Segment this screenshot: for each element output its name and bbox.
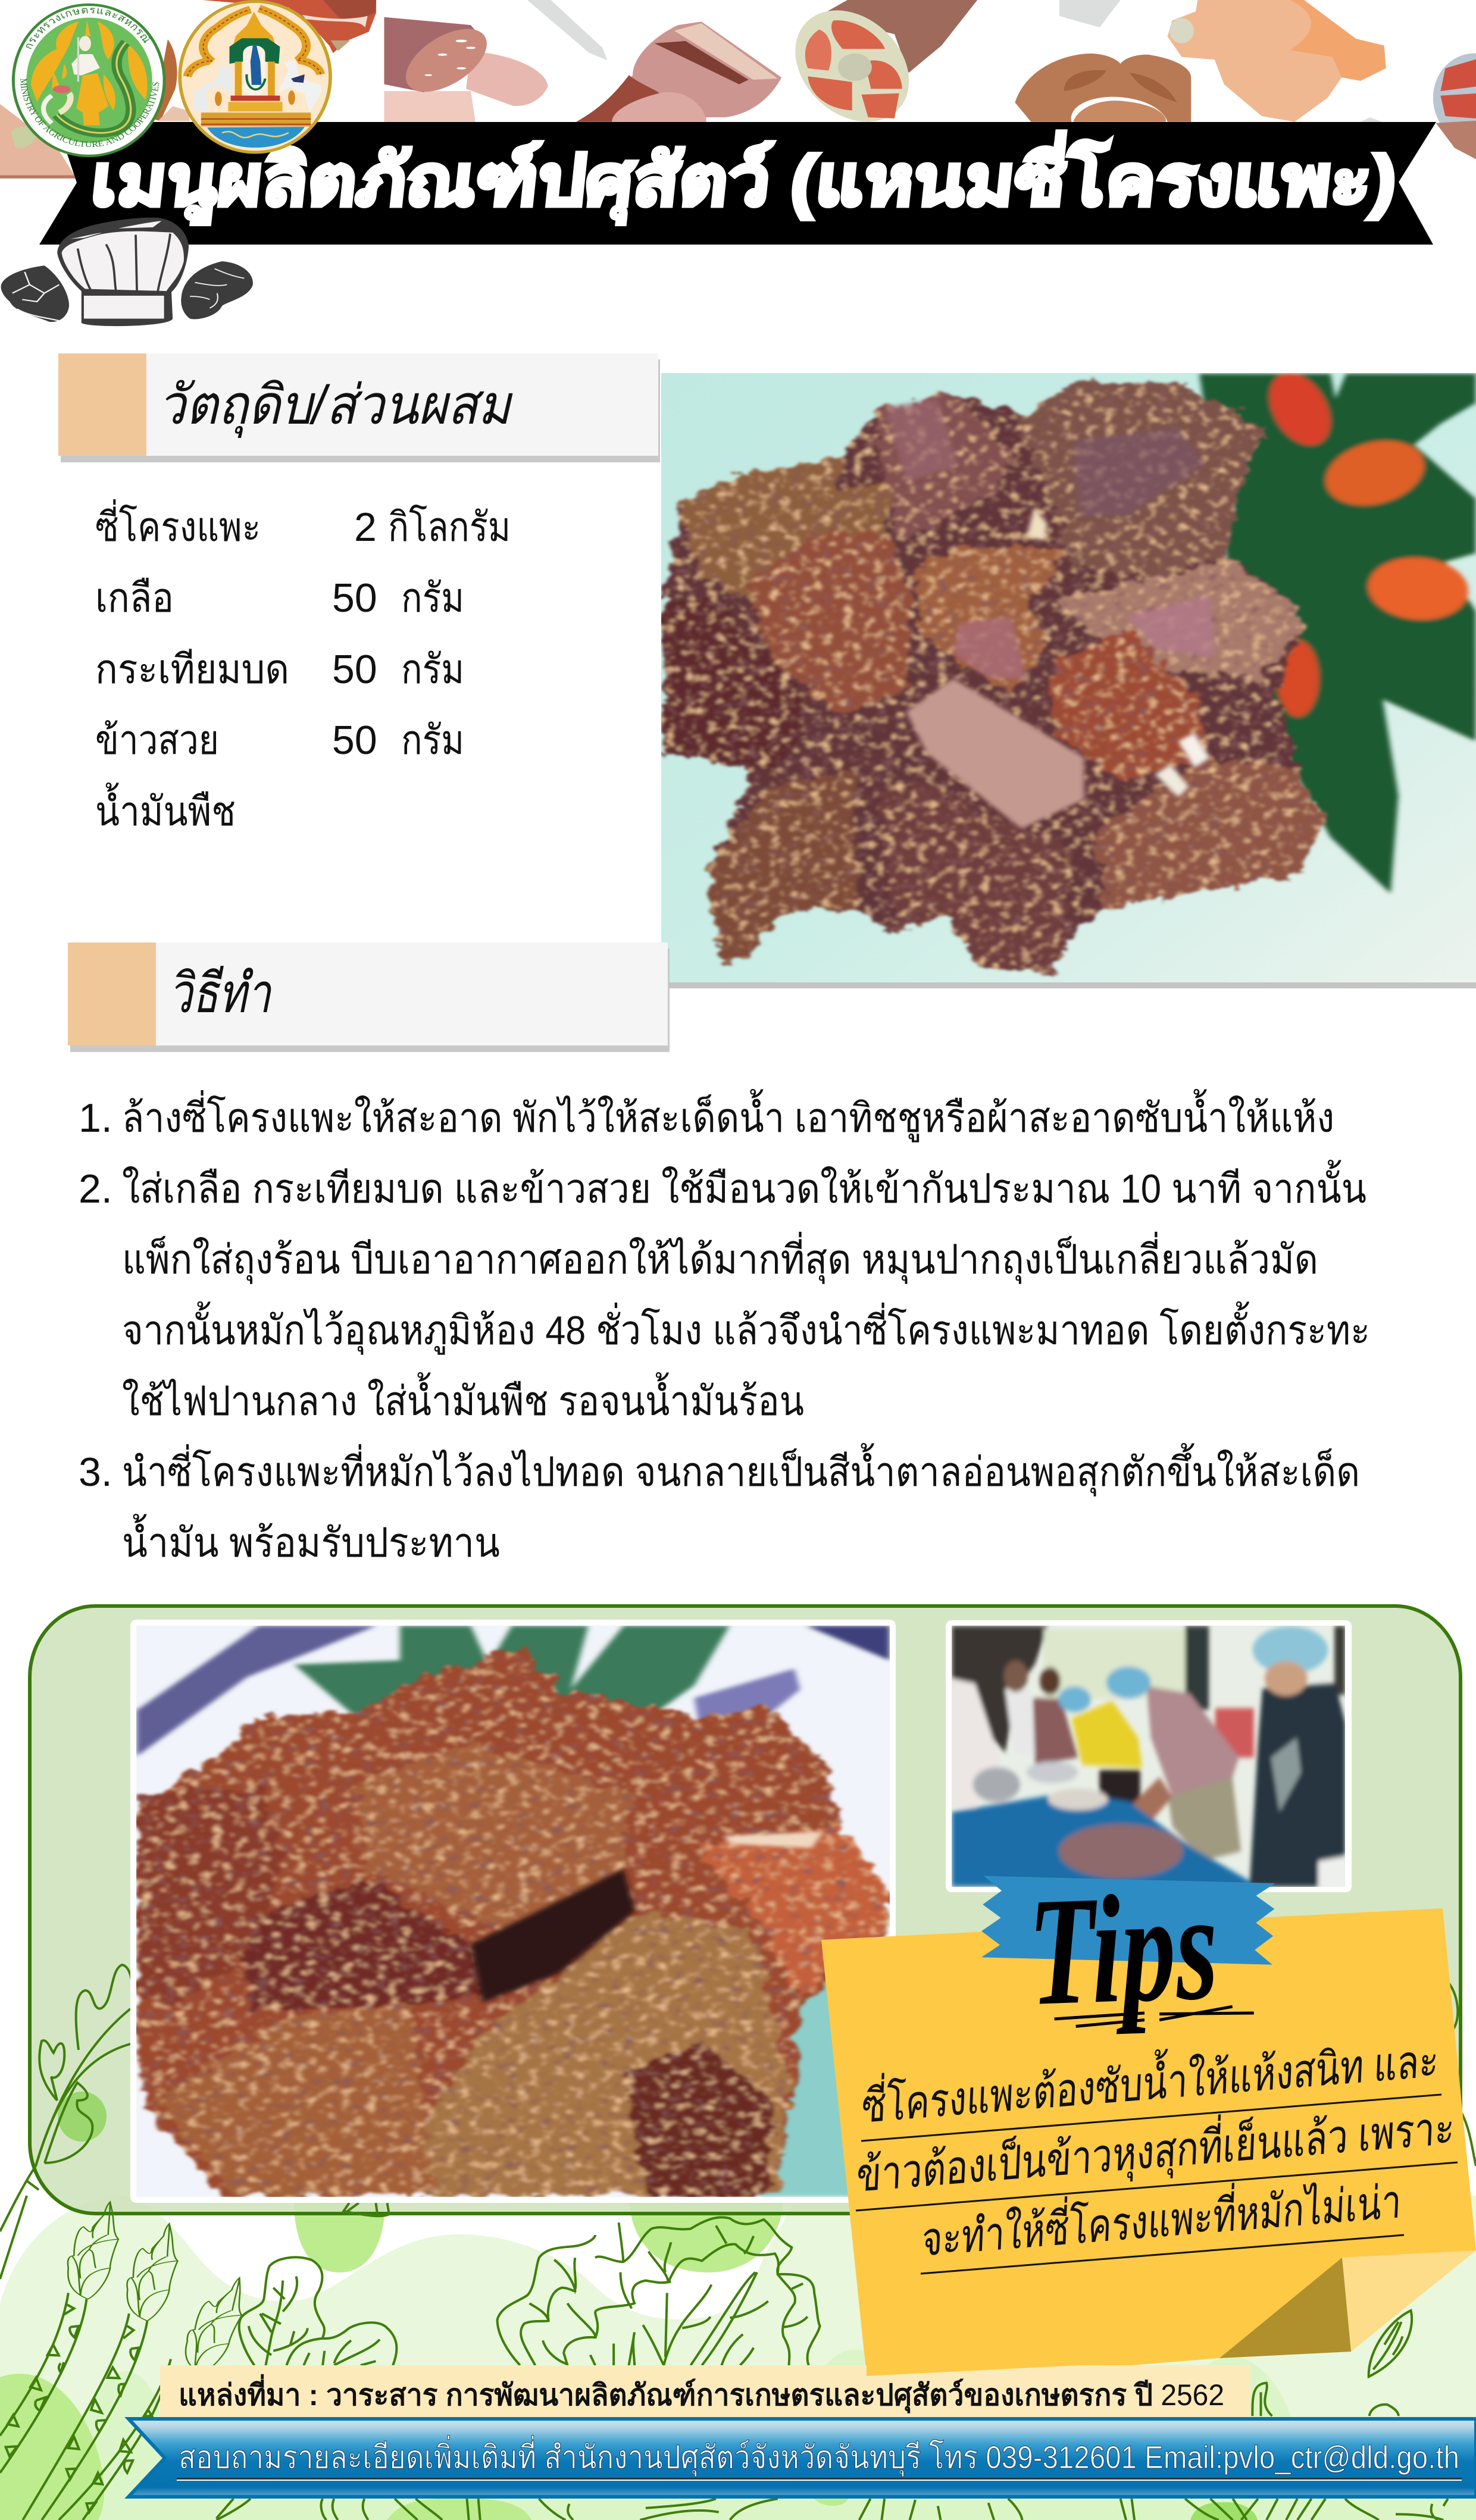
- text block: ingredients list: กระเทียมบด: [95, 647, 289, 692]
- plant: left lettuce: [239, 2258, 396, 2365]
- decoration: right lettuce and leaf line art: [595, 2217, 1448, 2520]
- panel: ingredients heading: วัตถุดิบ/ส่วนผสม: [158, 375, 513, 438]
- icon: ministry of agriculture seal: [12, 4, 166, 157]
- panel: ingredients heading: [58, 353, 660, 462]
- banner illustrations: cartoon meats: [384, 0, 1476, 159]
- heading: tips: Tips: [1026, 1860, 1221, 2038]
- decoration: small green dot: [58, 2092, 107, 2142]
- icon: ministry of agriculture seal: MINISTRY OF AGRICULTURE AND COOPERATIVES: [20, 79, 160, 148]
- text block: ingredients list: 50: [332, 575, 377, 621]
- note fold: light flap: [1342, 2250, 1476, 2352]
- plant: asparagus two: [23, 2224, 177, 2520]
- plant: central lettuce right half: [595, 2217, 820, 2365]
- plant: asparagus one: [0, 2202, 118, 2473]
- text block: ingredients list: 2: [354, 505, 377, 550]
- decoration: left asparagus and lettuce line art: [0, 2202, 595, 2520]
- plant: lower stems under ribbon left: [217, 2499, 573, 2520]
- icon: chef hat with steaks: [1, 218, 253, 326]
- text block: ingredients list: [95, 499, 511, 834]
- icon: livestock department seal: [180, 1, 330, 152]
- plant: small sprouts: [1252, 2383, 1399, 2416]
- background: light green hills: [0, 2196, 1476, 2520]
- icon: left steak: [1, 265, 69, 322]
- illustration: left plate and red meat: [0, 0, 376, 179]
- text block: ingredients list: ซี่โครงแพะ: [95, 499, 261, 550]
- photo: farmers preparing ribs: [946, 1620, 1352, 1892]
- text block: method steps: 3.: [79, 1450, 112, 1495]
- illustration: sausage slices: [384, 17, 548, 122]
- plant: sliver above panel bottom: [343, 2203, 389, 2217]
- illustration: meat cross section: [781, 0, 977, 123]
- decoration: branch on panel: [0, 1965, 134, 2231]
- panel: method heading: [68, 943, 670, 1052]
- callout: yellow tips note: [821, 1908, 1476, 2376]
- illustration: ham: [576, 21, 781, 122]
- title banner: black ribbon: [39, 122, 1436, 245]
- icon: ministry of agriculture seal: กระทรวงเกษตรและสหกรณ์: [26, 8, 152, 49]
- decoration: blue tape: [981, 1876, 1275, 1965]
- plant: lower stems under ribbon right: [640, 2499, 1448, 2520]
- plant: right leaf: [1369, 2311, 1412, 2377]
- contact ribbon: [129, 2419, 1476, 2497]
- text block: ingredients list: น้ำมันพืช: [95, 782, 236, 834]
- text block: ingredients list: กิโลกรัม: [388, 504, 511, 550]
- text block: method steps: น้ำมัน พร้อมรับประทาน: [122, 1514, 500, 1566]
- text block: method steps: ใส่เกลือ กระเทียมบด และข้าวสวย ใช้มือนวดให้เข้ากันประมาณ 10 นาที จากนั้น: [122, 1160, 1366, 1212]
- icon: chef hat: [57, 218, 189, 326]
- text block: method steps: ใช้ไฟปานกลาง ใส่น้ำมันพืช รอจนน้ำมันร้อน: [122, 1372, 804, 1424]
- text block: tips advice: [855, 2027, 1458, 2274]
- text block: method steps: จากนั้นหมักไว้อุณหภูมิห้อง 48 ชั่วโมง แล้วจึงนำซี่โครงแพะมาทอด โดยตั้งกระทะ: [122, 1301, 1370, 1355]
- text block: method steps: ล้างซี่โครงแพะให้สะอาด พักไว้ให้สะเด็ดน้ำ เอาทิชชูหรือผ้าสะอาดซับน้ำให้แห้ง: [122, 1089, 1334, 1142]
- text block: ingredients list: 50: [332, 647, 377, 692]
- illustration: chicken leg: [1168, 0, 1386, 122]
- text block: ingredients list: ข้าวสวย: [95, 718, 219, 763]
- text block: ingredients list: 50: [332, 718, 377, 763]
- text block: method steps: นำซี่โครงแพะที่หมักไว้ลงไปทอด จนกลายเป็นสีน้ำตาลอ่อนพอสุกตักขึ้นให้สะเด็ด: [122, 1443, 1360, 1497]
- decoration: left stray stem: [0, 2196, 27, 2279]
- decoration: right side curls: [1447, 1981, 1476, 2166]
- text block: method steps: แพ็กใส่ถุงร้อน บีบเอาอากาศออกให้ได้มากที่สุด หมุนปากถุงเป็นเกลี่ยวแล้วมัด: [122, 1232, 1318, 1284]
- title: เมนูผลิตภัณฑ์ปศุสัตว์ (แหนมซี่โครงแพะ): [87, 131, 1402, 224]
- panel: method heading: วิธีทำ: [168, 963, 273, 1024]
- text block: method steps: 1.: [79, 1095, 112, 1141]
- text block: ingredients list: กรัม: [401, 718, 464, 763]
- note fold: shadow: [1219, 2258, 1351, 2358]
- illustration: sausage links: [1015, 54, 1191, 122]
- panel: green photo background: [30, 1606, 1461, 2214]
- text block: method steps: 2.: [79, 1166, 112, 1212]
- text block: ingredients list: เกลือ: [95, 575, 174, 621]
- icon: right steak: [181, 261, 253, 319]
- illustration: shadow stripes: [527, 0, 1382, 122]
- text block: method steps: [79, 1089, 1370, 1566]
- illustration: right meat: [1433, 54, 1476, 159]
- source bar: แหล่งที่มา : วาระสาร การพัฒนาผลิตภัณฑ์การเกษตรและปศุสัตว์ของเกษตรกร ปี 2562: [179, 2374, 1224, 2413]
- source bar: [160, 2358, 1250, 2417]
- text block: ingredients list: กรัม: [401, 575, 464, 621]
- text block: ingredients list: กรัม: [401, 647, 464, 692]
- photo: fried ribs close-up: [130, 1620, 896, 2203]
- plant: asparagus three: [59, 2276, 248, 2520]
- photo: fried goat ribs on leaf: [661, 367, 1476, 988]
- plant: central lettuce left half: [498, 2235, 595, 2365]
